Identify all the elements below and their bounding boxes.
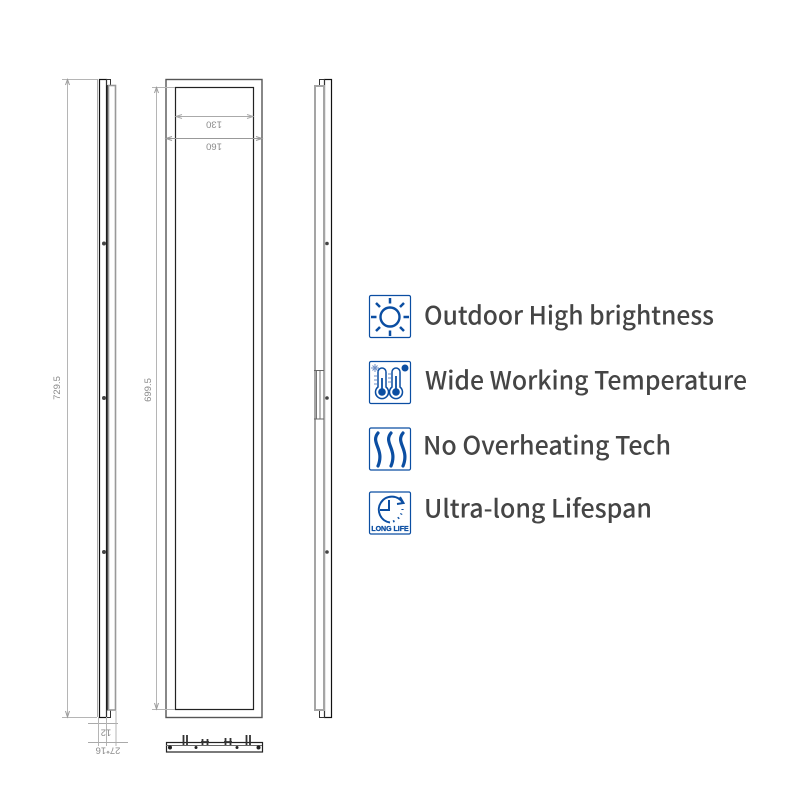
dimension: width 130 [176, 114, 253, 130]
icon: clock, long life: LONG LIFE [371, 526, 409, 533]
icon: clock, long life [370, 492, 410, 534]
feature text: Ultra-long Lifespan: Ultra-long Lifespan [424, 490, 652, 526]
feature text: Outdoor High brightness: Outdoor High brightness [424, 296, 714, 332]
dimension: depth 27*16: 27*16 [96, 744, 120, 756]
dimension: width 160: 160 [206, 140, 222, 152]
dimension: depth 27*16 [88, 742, 128, 756]
icon: sun, outdoor high brightness [370, 296, 410, 338]
feature text: Wide Working Temperature: Wide Working Temperature [425, 362, 747, 398]
dimension: width 160 [166, 136, 262, 152]
front view: frame outline [166, 80, 262, 718]
icon: thermometers, wide working temperature [370, 362, 410, 404]
side view: right panel drawing [314, 80, 332, 718]
dimension: depth 12: 12 [101, 726, 111, 738]
dimension: overall height 729.5: 729.5 [52, 376, 63, 400]
feature text: No Overheating Tech: No Overheating Tech [423, 426, 671, 462]
dimension: inner height 699.5 [143, 87, 175, 710]
icon: heat waves, no overheating tech [370, 428, 410, 470]
dimension: depth 12 [88, 711, 118, 746]
dimension: width 130: 130 [206, 118, 222, 130]
dimension: overall height 729.5 [52, 79, 97, 718]
dimension: inner height 699.5: 699.5 [143, 378, 154, 402]
side view: left panel drawing [98, 79, 116, 718]
bottom view: connector bar [166, 735, 262, 752]
